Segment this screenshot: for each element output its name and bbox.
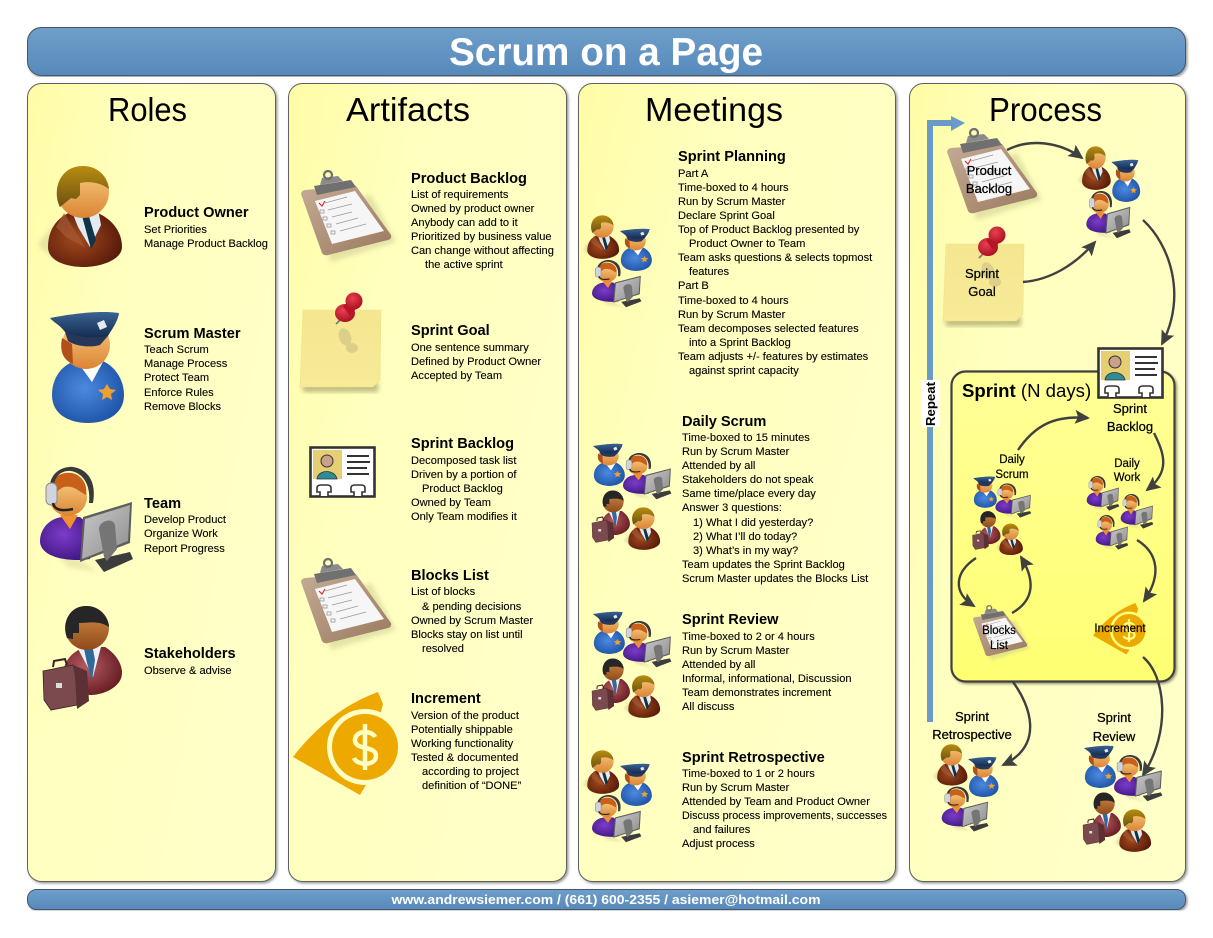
meeting: sprint review: All discuss (682, 701, 735, 713)
icon: product backlog clipboard (301, 171, 396, 262)
meeting: daily scrum (682, 414, 868, 585)
sprint heading: Sprint (N days) (962, 380, 1091, 401)
blocks list: Blocks (982, 625, 1016, 637)
process: sprint review: Sprint (1097, 710, 1131, 725)
meeting: sprint planning: Sprint Planning (678, 149, 786, 165)
meeting: sprint retrospective: Discuss process improvements, successes (682, 810, 887, 822)
meeting: sprint retrospective: Time-boxed to 1 or 2 hours (682, 768, 815, 780)
meeting: sprint retrospective: and failures (693, 824, 751, 836)
meeting: sprint planning: Part B (678, 280, 709, 292)
label: daily work: Daily (1114, 458, 1140, 470)
increment: Increment (1094, 623, 1146, 635)
meeting: sprint planning: Run by Scrum Master (678, 309, 786, 321)
role: scrum master: Manage Process (144, 358, 228, 370)
meeting: sprint planning: Declare Sprint Goal (678, 210, 775, 222)
label: daily work: Work (1114, 472, 1141, 484)
artifact: sprint goal: One sentence summary (411, 342, 529, 354)
role: product owner: Set Priorities (144, 224, 207, 236)
arrow: blocks to scrum (1012, 557, 1031, 613)
heading: meetings: Meetings (645, 91, 783, 128)
process: sprint goal: Sprint (965, 266, 999, 281)
artifact: product backlog: the active sprint (425, 259, 503, 271)
meeting: sprint planning: against sprint capacity (689, 365, 799, 377)
blocks list: List (990, 640, 1009, 652)
meeting: sprint planning: Time-boxed to 4 hours (678, 182, 789, 194)
artifact: sprint backlog: Driven by a portion of (411, 469, 517, 481)
label: daily scrum: Scrum (995, 469, 1029, 481)
artifact: increment: Version of the product (411, 710, 519, 722)
meeting: sprint review: Time-boxed to 2 or 4 hours (682, 631, 815, 643)
arrow: increment to review (1143, 657, 1162, 775)
artifact: sprint goal (411, 323, 541, 382)
artifact: product backlog: Prioritized by business value (411, 231, 552, 243)
icon: increment (293, 692, 403, 795)
process: sprint review: Review (1093, 729, 1136, 744)
role: stakeholders: Stakeholders (144, 646, 236, 662)
artifact: increment (411, 691, 522, 792)
artifact: increment: Tested & documented (411, 752, 518, 764)
meeting: sprint planning: Run by Scrum Master (678, 196, 786, 208)
meeting: daily scrum: Scrum Master updates the Blocks List (682, 573, 868, 585)
icon: blocks list clipboard (301, 559, 396, 650)
meeting: sprint retrospective (682, 750, 887, 850)
process: sprint planning group (1078, 146, 1140, 238)
role: scrum master (144, 326, 241, 413)
artifact: sprint goal: Accepted by Team (411, 370, 502, 382)
artifact: increment: Potentially shippable (411, 724, 513, 736)
artifact: blocks list: Owned by Scrum Master (411, 615, 533, 627)
meeting: sprint planning: Part A (678, 168, 709, 180)
icon group: daily scrum (592, 444, 671, 550)
role: team: Organize Work (144, 528, 218, 540)
arrow: planning to sprint backlog (1143, 220, 1174, 344)
arrow: repeat loop: Repeat (923, 381, 938, 426)
process: product backlog: Product (967, 163, 1012, 178)
process: product backlog (947, 129, 1042, 220)
artifact: blocks list: resolved (422, 643, 464, 655)
meeting: daily scrum: Attended by all (682, 460, 755, 472)
artifact: sprint backlog: Product Backlog (422, 483, 503, 495)
process: sprint review (1083, 710, 1162, 852)
meeting: sprint planning: Team decomposes selected features (678, 323, 859, 335)
meeting: sprint review: Team demonstrates increment (682, 687, 831, 699)
artifact: sprint backlog: Sprint Backlog (411, 436, 514, 452)
artifact: sprint goal: Sprint Goal (411, 323, 490, 339)
meeting: daily scrum: Stakeholders do not speak (682, 474, 814, 486)
footer contact: www.andrewsiemer.com / (661) 600-2355 / asiemer@hotmail.com (390, 892, 820, 907)
arrow: goal to planning (1023, 242, 1095, 282)
meeting: sprint planning: Team adjusts +/- features by estimates (678, 351, 869, 363)
meeting: daily scrum: Team updates the Sprint Backlog (682, 559, 845, 571)
meeting: sprint review: Informal, informational, Discussion (682, 673, 852, 685)
icon group: sprint review (592, 612, 671, 718)
label: daily scrum: Daily (999, 454, 1025, 466)
daily work team (1086, 476, 1153, 550)
artifact: product backlog: Product Backlog (411, 171, 527, 187)
artifact: increment: Working functionality (411, 738, 514, 750)
meeting: sprint planning: Team asks questions & selects topmost (678, 252, 872, 264)
arrow: repeat loop (921, 116, 965, 722)
meeting: sprint planning (678, 149, 872, 377)
artifact: product backlog: Can change without affecting (411, 245, 554, 257)
increment (1093, 603, 1148, 654)
meeting: sprint retrospective: Attended by Team and Product Owner (682, 796, 870, 808)
role: scrum master: Scrum Master (144, 326, 241, 342)
artifact: blocks list: Blocks stay on list until (411, 629, 523, 641)
artifact: product backlog: Owned by product owner (411, 203, 535, 215)
role: team: Report Progress (144, 543, 225, 555)
meeting: daily scrum: Same time/place every day (682, 488, 816, 500)
arrow: scrum to blocks (959, 558, 976, 606)
sprint backlog card (1098, 348, 1162, 398)
meeting: sprint review: Sprint Review (682, 612, 779, 628)
panel: process (910, 84, 1186, 882)
role: team: Develop Product (144, 514, 226, 526)
icon: scrum master (50, 312, 124, 423)
label: sprint backlog: Backlog (1107, 419, 1153, 434)
role: scrum master: Remove Blocks (144, 401, 222, 413)
meeting: sprint planning: Top of Product Backlog presented by (678, 224, 860, 236)
icon: stakeholders (43, 606, 122, 710)
panel: meetings (578, 84, 896, 882)
meeting: sprint planning: into a Sprint Backlog (689, 337, 791, 349)
artifact: increment: according to project (422, 766, 519, 778)
meeting: sprint planning: Product Owner to Team (689, 238, 805, 250)
label: daily scrum (995, 454, 1029, 481)
label: sprint backlog: Sprint (1113, 401, 1147, 416)
blocks list (973, 606, 1030, 660)
label: sprint backlog (1107, 401, 1153, 434)
meeting: sprint review: Attended by all (682, 659, 755, 671)
meeting: daily scrum: 1) What I did yesterday? (693, 517, 813, 529)
icon: product owner (38, 166, 122, 267)
role: scrum master: Teach Scrum (144, 344, 209, 356)
process: sprint retrospective (932, 709, 1012, 832)
role: scrum master: Enforce Rules (144, 387, 214, 399)
meeting: daily scrum: Daily Scrum (682, 414, 766, 430)
heading: process: Process (989, 91, 1102, 128)
artifact: blocks list: Blocks List (411, 568, 489, 584)
icon group: sprint retrospective (583, 750, 652, 842)
heading: artifacts: Artifacts (346, 91, 470, 128)
role: team: Team (144, 496, 181, 512)
artifact: increment: Increment (411, 691, 481, 707)
meeting: sprint review (682, 612, 852, 713)
panel: roles (28, 84, 276, 882)
meeting: daily scrum: 3) What’s in my way? (693, 545, 798, 557)
title bar (28, 28, 1186, 76)
meeting: sprint planning: features (689, 266, 730, 278)
artifact: sprint backlog: Owned by Team (411, 497, 491, 509)
arrow: scrum to sprint backlog (1018, 417, 1088, 450)
meeting: sprint review: Run by Scrum Master (682, 645, 790, 657)
meeting: daily scrum: Time-boxed to 15 minutes (682, 432, 810, 444)
label: daily work (1114, 458, 1141, 484)
meeting: sprint retrospective: Sprint Retrospective (682, 750, 825, 766)
artifact: blocks list: List of blocks (411, 586, 476, 598)
artifact: increment: definition of “DONE” (422, 780, 522, 792)
role: stakeholders: Observe & advise (144, 665, 232, 677)
title: Scrum on a Page (449, 31, 763, 74)
meeting: daily scrum: 2) What I’ll do today? (693, 531, 797, 543)
artifact: sprint backlog (411, 436, 517, 523)
icon: team (38, 467, 133, 572)
arrow: sprint backlog to work (1147, 433, 1163, 490)
meeting: daily scrum: Answer 3 questions: (682, 502, 782, 514)
artifact: product backlog: List of requirements (411, 189, 509, 201)
arrow: sprint to retrospective (1003, 682, 1030, 765)
artifact: sprint goal: Defined by Product Owner (411, 356, 541, 368)
meeting: daily scrum: Run by Scrum Master (682, 446, 790, 458)
artifact: sprint backlog: Only Team modifies it (411, 511, 517, 523)
artifact: sprint backlog: Decomposed task list (411, 455, 516, 467)
meeting: sprint planning: Time-boxed to 4 hours (678, 295, 789, 307)
artifact: blocks list: & pending decisions (422, 601, 522, 613)
role: team (144, 496, 226, 555)
arrow: backlog to planning (1007, 143, 1082, 158)
process: sprint goal (943, 226, 1024, 326)
process: sprint retrospective: Sprint (955, 709, 989, 724)
meeting: sprint retrospective: Adjust process (682, 838, 755, 850)
artifact: product backlog (411, 171, 554, 271)
panel: artifacts (288, 84, 566, 882)
icon group: sprint planning (583, 215, 652, 307)
role: product owner: Manage Product Backlog (144, 238, 268, 250)
footer bar (28, 890, 1186, 910)
sprint box (952, 348, 1174, 682)
icon: sprint goal note (300, 292, 381, 392)
role: product owner: Product Owner (144, 205, 249, 221)
heading: roles: Roles (108, 91, 187, 128)
process: product backlog: Backlog (966, 181, 1012, 196)
process: sprint goal: Goal (968, 284, 996, 299)
role: scrum master: Protect Team (144, 372, 209, 384)
daily scrum group (972, 477, 1031, 555)
artifact: blocks list (411, 568, 533, 655)
role: stakeholders (144, 646, 236, 677)
role: product owner (144, 205, 268, 250)
artifact: product backlog: Anybody can add to it (411, 217, 518, 229)
icon: sprint backlog card (310, 448, 374, 496)
process: sprint retrospective: Retrospective (932, 727, 1012, 742)
meeting: sprint retrospective: Run by Scrum Master (682, 782, 790, 794)
arrow: work to increment (1137, 540, 1155, 601)
